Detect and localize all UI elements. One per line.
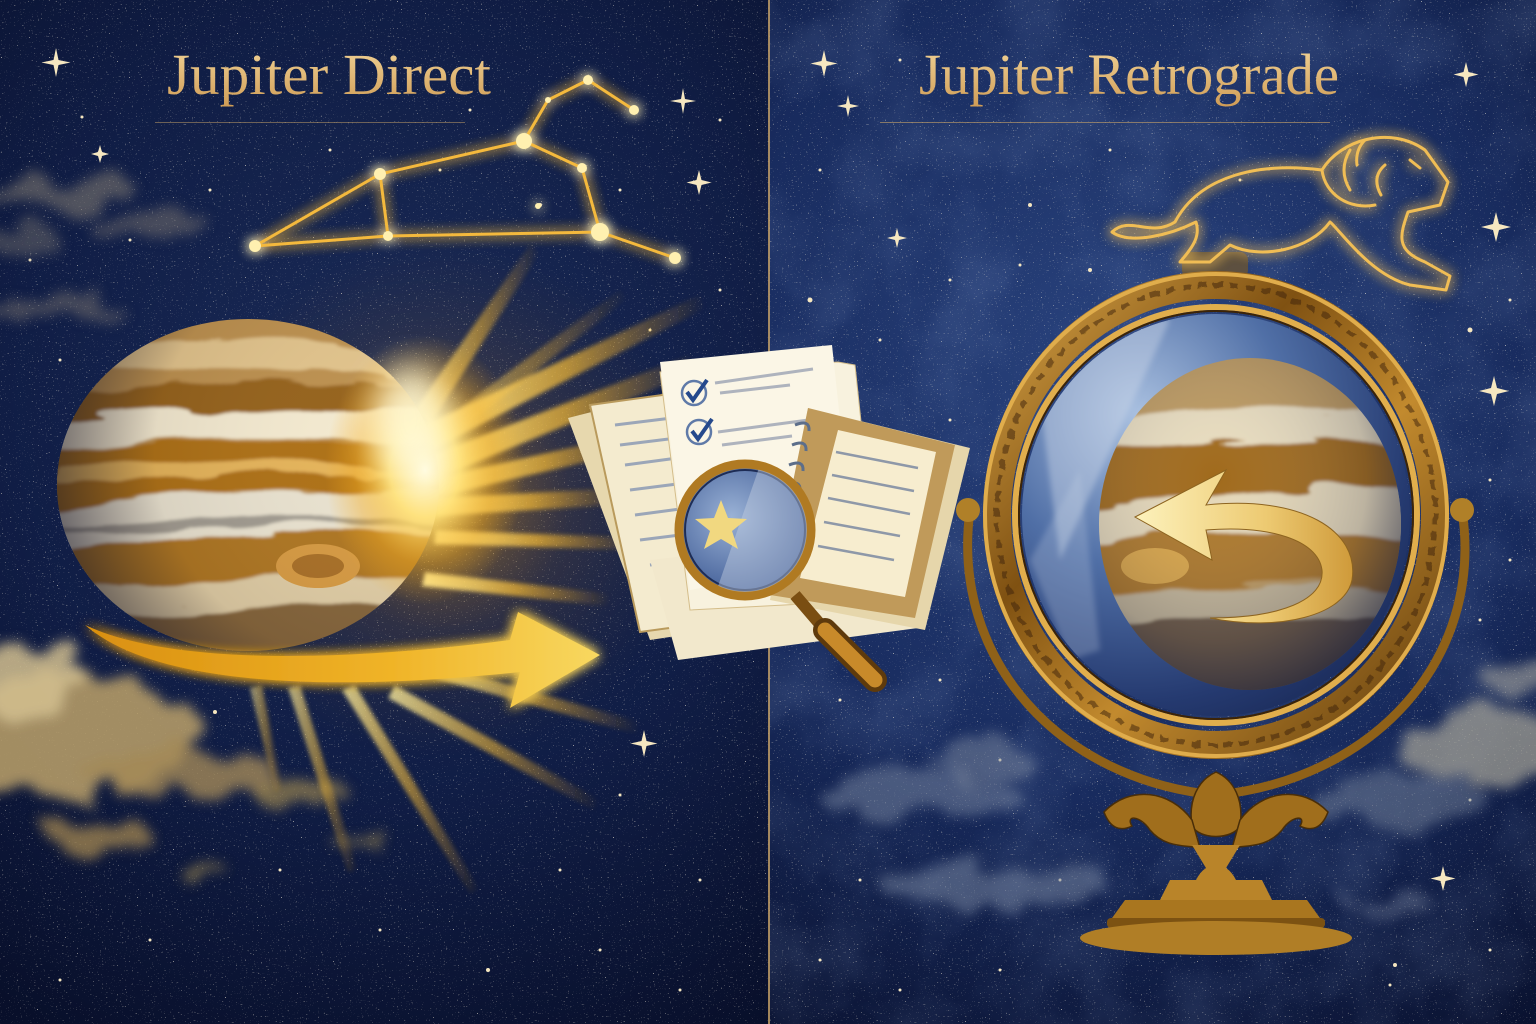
clouds: right side (820, 655, 1536, 916)
mirror: frame engraving (997, 285, 1435, 745)
mirror: frame rings (985, 274, 1447, 756)
clouds: left side (0, 177, 388, 879)
mirror: reflection streaks (1030, 310, 1170, 660)
paper: bottom sheet (650, 530, 918, 660)
title rule: left (155, 122, 465, 123)
flare: planet bright limb (325, 335, 525, 605)
constellation: Leo stars (249, 75, 681, 264)
stack of documents with checklist and magnifier (568, 345, 970, 680)
paper: checklist sheet (660, 345, 880, 610)
arrow: direct motion (85, 612, 600, 708)
mirror: oval frame (997, 285, 1435, 745)
mirror: stem (1192, 845, 1240, 880)
title: Jupiter Retrograde: Jupiter Retrograde (919, 42, 1339, 107)
glow behind rays (180, 240, 700, 760)
mirror: ornate scroll base (1104, 772, 1328, 848)
mirror: stepped pedestal (1080, 880, 1352, 955)
paper: back left sheet (568, 378, 815, 640)
background: right panel (769, 0, 1536, 1024)
title: Jupiter Direct: Jupiter Direct (167, 42, 491, 107)
planet: Jupiter reflected (1099, 358, 1401, 690)
background mottling (769, 0, 1536, 1024)
mirror: finials (956, 252, 1474, 522)
title rule: right (880, 122, 1330, 123)
background: left panel (0, 0, 769, 1024)
arrow: retrograde motion (1135, 470, 1353, 623)
mirror: stand arms (968, 510, 1465, 795)
constellation: Leo lion outline (1112, 137, 1450, 290)
mirror: glass (1022, 314, 1410, 716)
notebook (770, 408, 970, 630)
paper: left sheet (590, 385, 800, 632)
planet: Jupiter direct (57, 319, 436, 651)
centre divider (768, 0, 770, 1024)
icon: check marks (682, 380, 712, 444)
sun rays from planet limb (250, 245, 706, 893)
magnifying glass (679, 464, 875, 680)
